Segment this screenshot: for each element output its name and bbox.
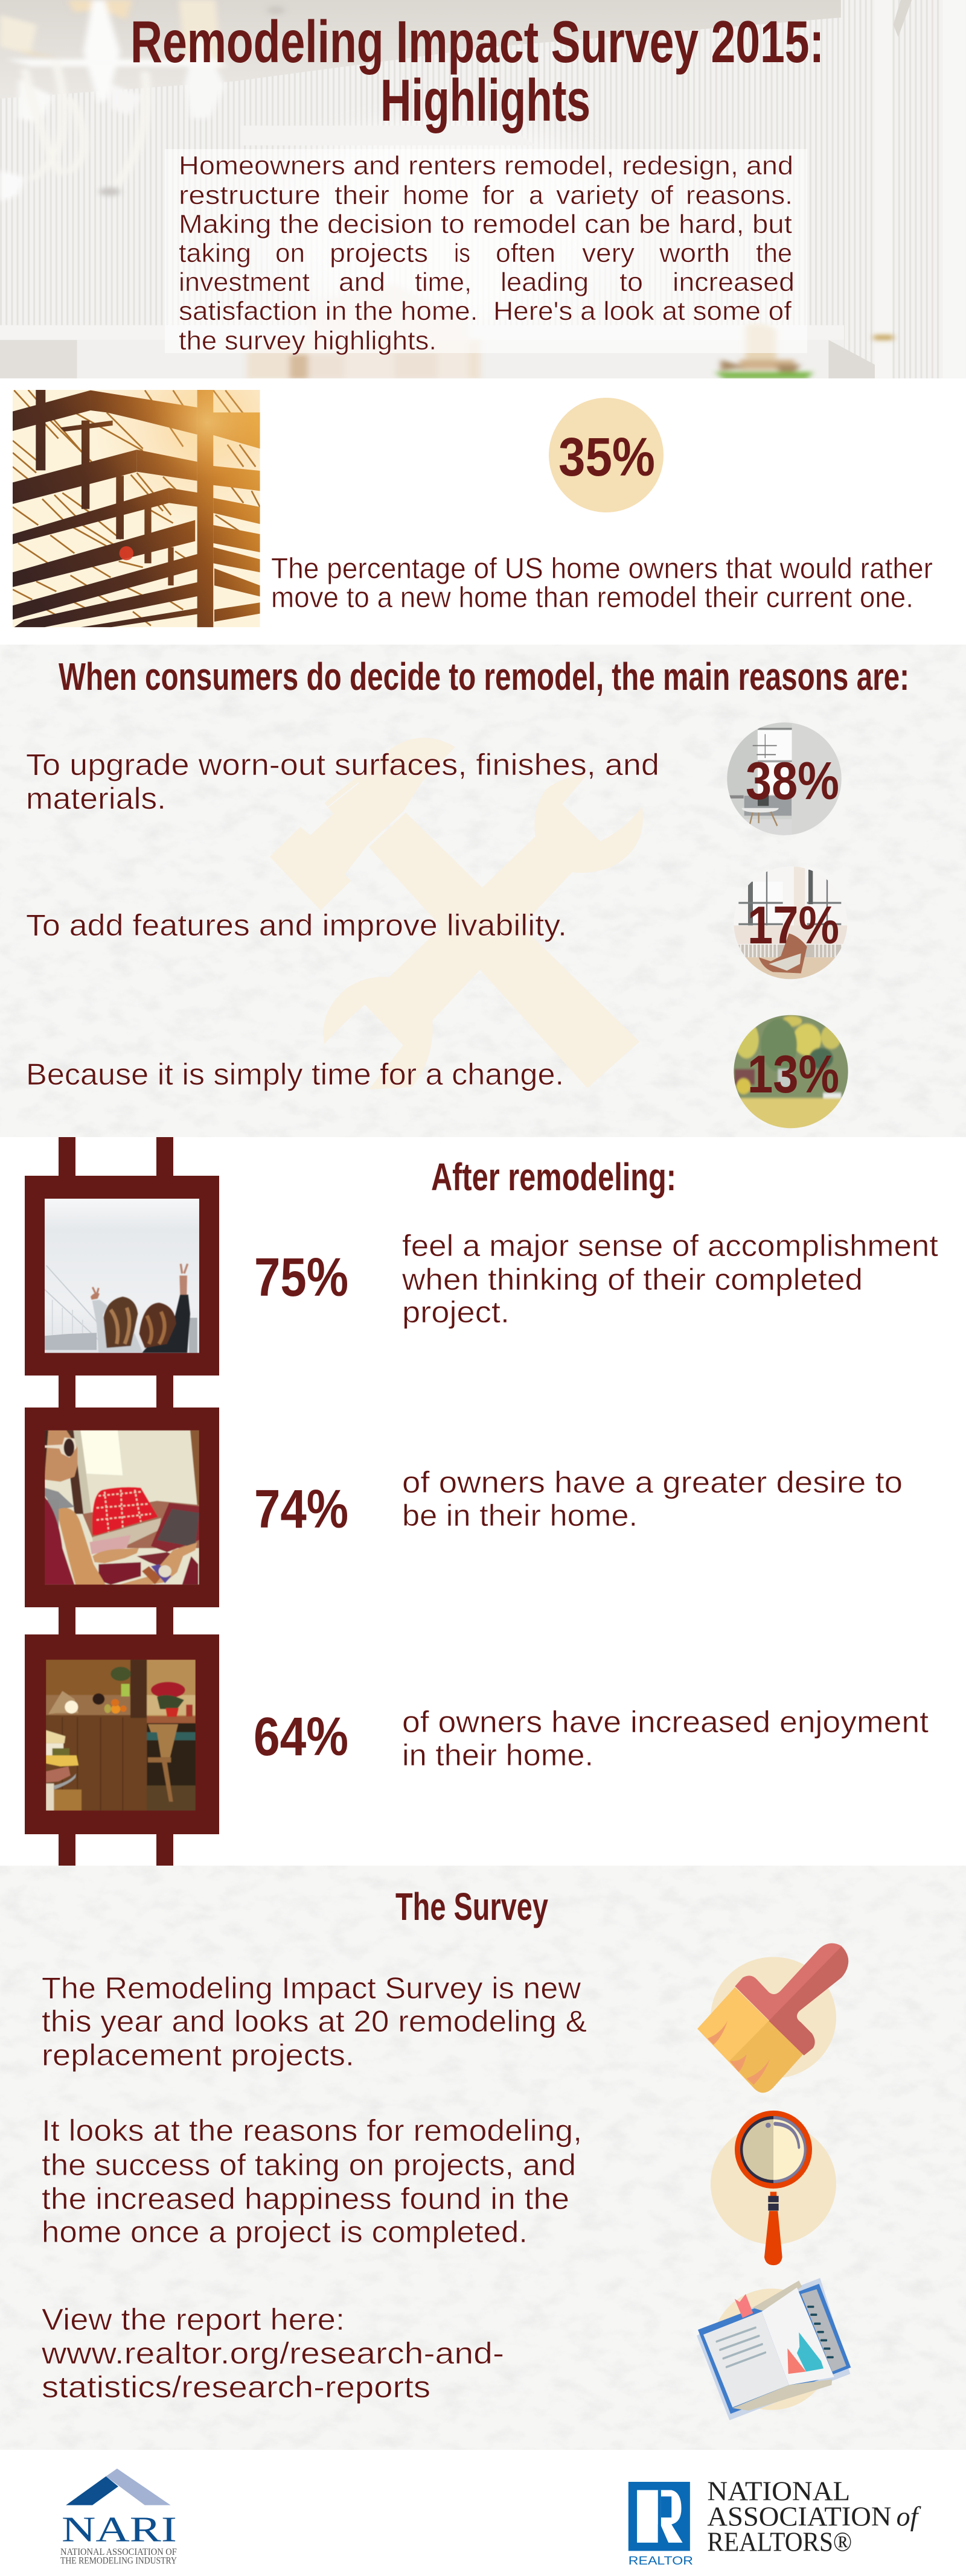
reason 1 text: To upgrade worn-out surfaces, finishes, and xyxy=(26,748,659,782)
association name: of xyxy=(897,2501,921,2532)
frame with photo: woman with tablet xyxy=(25,1408,219,1607)
NARI roof mark xyxy=(66,2469,171,2505)
association name: REALTORS® xyxy=(707,2527,852,2557)
icon: hammer and wrench watermark xyxy=(270,738,643,1089)
intro paragraph: leading xyxy=(501,267,589,297)
photo: garden circle xyxy=(732,1013,849,1130)
reason 1 text: materials. xyxy=(26,782,166,815)
reason 2 text: To add features and improve livability. xyxy=(26,908,567,942)
intro paragraph: the survey highlights. xyxy=(179,326,437,355)
title xyxy=(130,8,824,133)
stat: 74 percent: of owners have a greater desire to xyxy=(402,1465,903,1499)
survey paragraph 2: the increased happiness found in the xyxy=(42,2182,569,2216)
heading: after remodeling: After remodeling: xyxy=(431,1155,676,1199)
hero room photo background xyxy=(0,0,966,380)
survey paragraph 2: the success of taking on projects, and xyxy=(42,2148,576,2182)
title: Highlights xyxy=(380,67,590,133)
intro paragraph: a xyxy=(529,180,544,210)
heading: the survey: The Survey xyxy=(395,1885,548,1928)
stat: 64 percent: 64% xyxy=(254,1707,348,1767)
stat: 75 percent xyxy=(254,1229,938,1329)
intro paragraph: home xyxy=(403,180,469,210)
survey paragraph 3: report link: www.realtor.org/research-and- xyxy=(41,2336,504,2370)
stat: 75 percent: 75% xyxy=(254,1248,348,1308)
logo: NARI xyxy=(60,2469,177,2566)
stat: 74 percent: 74% xyxy=(254,1479,348,1540)
intro paragraph xyxy=(179,151,795,355)
percent labels: 13% xyxy=(747,1044,839,1104)
stat: 74 percent: be in their home. xyxy=(402,1499,638,1532)
35 percent description: The percentage of US home owners that would rather xyxy=(271,553,933,585)
stat: 74 percent xyxy=(254,1465,903,1540)
survey paragraph 2: It looks at the reasons for remodeling, xyxy=(42,2114,582,2147)
NARI tagline: NATIONAL ASSOCIATION OF xyxy=(60,2547,177,2557)
survey paragraph 1: The Remodeling Impact Survey is new xyxy=(42,1971,581,2005)
stat: 64 percent xyxy=(254,1705,929,1772)
intro paragraph: restructure xyxy=(179,180,321,210)
intro paragraph: on xyxy=(275,238,305,268)
survey paragraph 1 xyxy=(42,1971,587,2072)
circle photos with percentages xyxy=(726,721,849,1130)
icon: paint brush xyxy=(697,1943,848,2093)
intro paragraph: to xyxy=(619,267,643,297)
percent labels: 17% xyxy=(747,895,839,955)
intro paragraph: variety xyxy=(556,180,639,210)
NARI tagline xyxy=(60,2547,177,2566)
NARI tagline: THE REMODELING INDUSTRY xyxy=(60,2555,177,2566)
intro paragraph: and xyxy=(339,267,385,297)
stat: 64 percent: in their home. xyxy=(402,1738,593,1772)
construction steel photo xyxy=(13,390,260,627)
intro text panel backdrop xyxy=(165,149,807,353)
intro paragraph: their xyxy=(334,180,389,210)
intro paragraph: increased xyxy=(673,267,795,297)
intro paragraph: projects xyxy=(330,238,428,268)
survey paragraph 3: report link xyxy=(41,2303,504,2404)
reason 1 text xyxy=(26,748,659,815)
intro paragraph: investment xyxy=(179,267,310,297)
photo: grey living room circle xyxy=(726,721,843,838)
survey paragraph 1: this year and looks at 20 remodeling & xyxy=(42,2004,587,2038)
association name xyxy=(707,2476,921,2557)
intro paragraph: the xyxy=(756,238,792,268)
35 percent description: move to a new home than remodel their current one. xyxy=(271,582,913,614)
survey paragraph 1: replacement projects. xyxy=(42,2038,354,2072)
reason 3 text: Because it is simply time for a change. xyxy=(26,1057,564,1091)
panel: 35 percent statistic xyxy=(13,390,933,627)
35 percent description xyxy=(271,553,933,614)
intro paragraph: Making the decision to remodel can be hard, but xyxy=(179,209,792,239)
association name: NATIONAL xyxy=(707,2476,850,2506)
intro paragraph: time, xyxy=(415,267,472,297)
film strip rails xyxy=(59,1137,173,1866)
panel: the survey xyxy=(0,1866,966,2450)
stat: 75 percent: when thinking of their completed xyxy=(401,1263,863,1296)
logo: National Association of Realtors xyxy=(629,2476,921,2567)
stat: 64 percent: of owners have increased enjoyment xyxy=(402,1705,929,1739)
35 percent circle: 35% xyxy=(558,427,655,488)
association name: ASSOCIATION xyxy=(707,2501,892,2532)
survey paragraph 3: report link: View the report here: xyxy=(42,2303,345,2336)
photo: chair and window circle xyxy=(732,864,849,981)
stat: 75 percent: feel a major sense of accomplishment xyxy=(402,1229,938,1263)
icon: open report book xyxy=(697,2278,851,2420)
intro paragraph: often xyxy=(496,238,555,268)
panel: after remodeling xyxy=(25,1137,938,1866)
intro paragraph: Homeowners and renters remodel, redesign, and xyxy=(179,151,793,180)
survey paragraph 2: home once a project is completed. xyxy=(42,2215,528,2249)
intro paragraph: very xyxy=(582,238,635,268)
realtor R block xyxy=(629,2482,690,2551)
survey paragraph 3: report link: statistics/research-reports xyxy=(42,2370,430,2404)
intro paragraph: reasons. xyxy=(686,180,793,210)
percent labels xyxy=(746,751,839,1104)
NARI wordmark: NARI xyxy=(62,2510,177,2549)
percent labels: 38% xyxy=(746,751,839,811)
icon: magnifying glass xyxy=(711,2111,836,2265)
survey paragraph 2 xyxy=(42,2114,582,2249)
stat: 75 percent: project. xyxy=(402,1295,510,1329)
intro paragraph: taking xyxy=(179,238,251,268)
intro paragraph: satisfaction in the home. Here's a look at some of xyxy=(179,296,792,326)
panel: main reasons to remodel xyxy=(0,645,966,1137)
intro paragraph: worth xyxy=(659,238,730,268)
intro paragraph: is xyxy=(454,238,470,268)
frame with photo: friends at bridge xyxy=(25,1176,219,1376)
REALTOR caption: REALTOR xyxy=(629,2554,693,2567)
panel: hero header xyxy=(0,0,966,380)
intro paragraph: for xyxy=(482,180,514,210)
intro paragraph: of xyxy=(650,180,674,210)
35 percent circle xyxy=(549,398,664,512)
frame with photo: wooden dining room xyxy=(25,1634,219,1834)
